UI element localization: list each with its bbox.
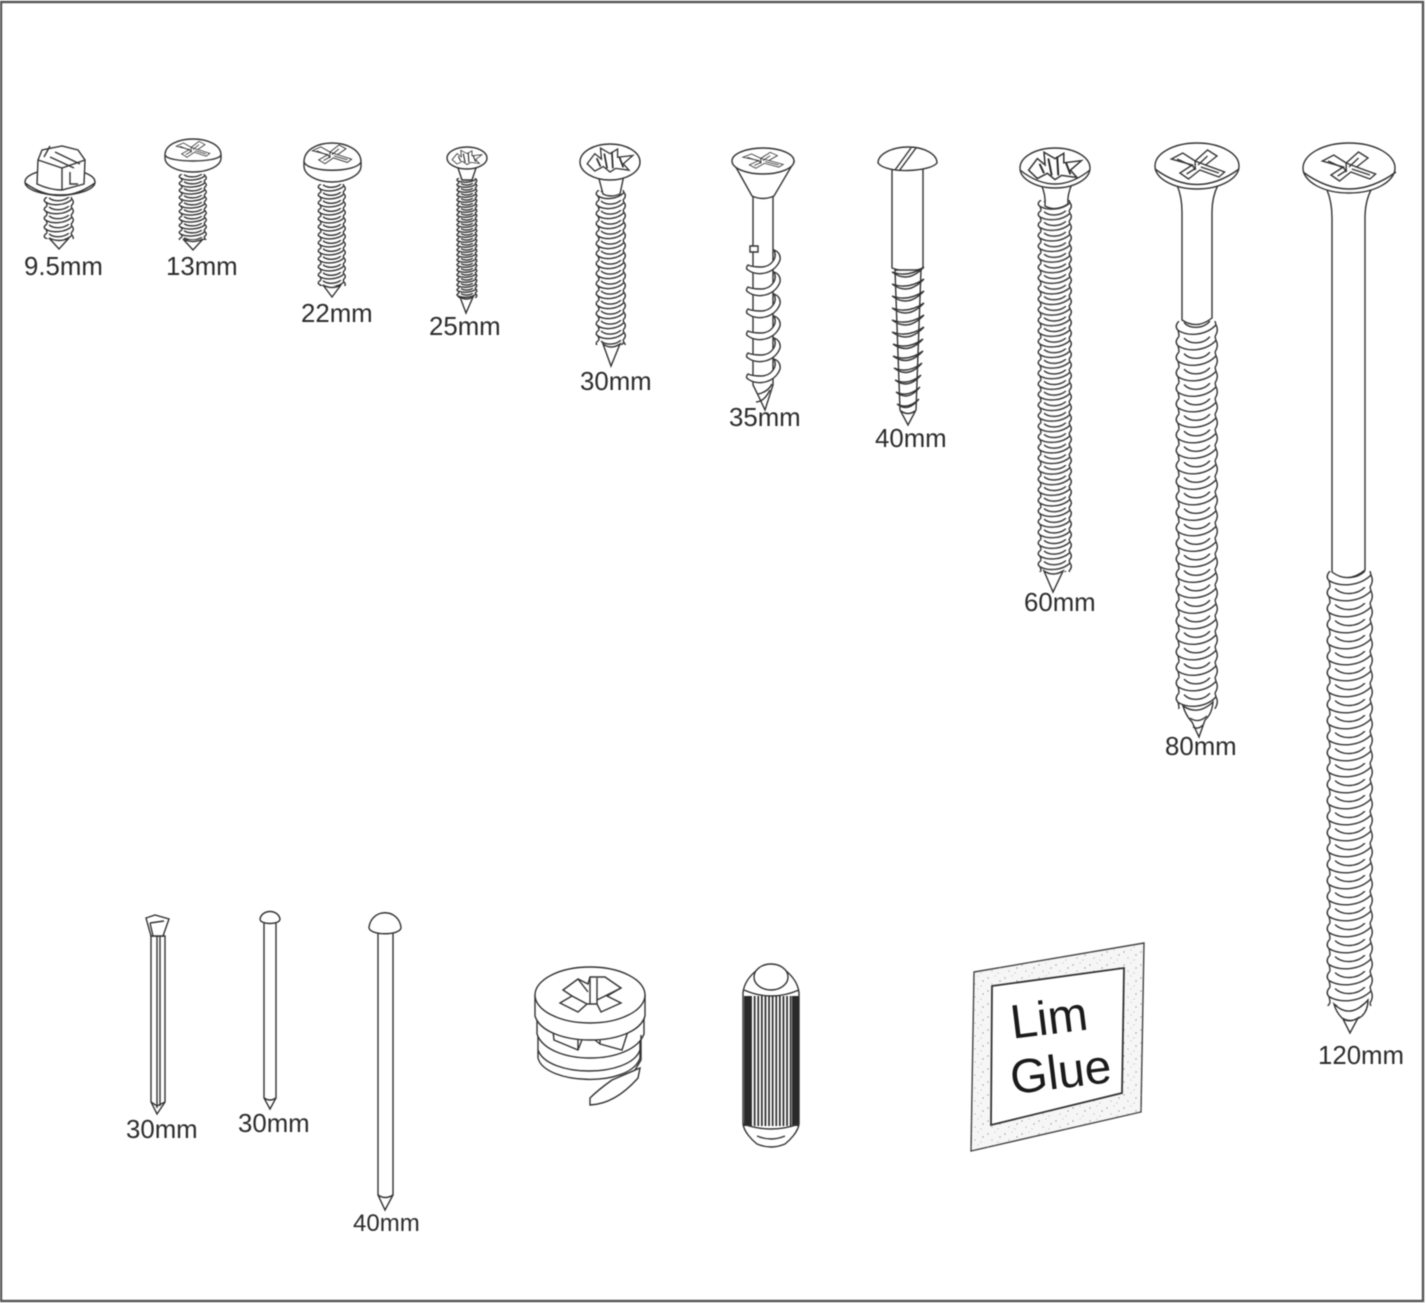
screw: 25mm	[429, 147, 501, 341]
shank	[1327, 190, 1371, 578]
shank	[892, 165, 923, 271]
screw: 120mm	[1303, 143, 1404, 1070]
thread and tip	[178, 174, 208, 250]
top disc	[535, 967, 645, 1040]
head	[165, 139, 221, 172]
glue text: Glue	[1007, 1040, 1114, 1105]
label: 30mm: 30mm	[580, 368, 652, 396]
label: 40mm: 40mm	[875, 425, 947, 453]
sachet outer	[971, 943, 1144, 1151]
screw: 9.5mm	[24, 146, 103, 281]
spiral thread	[746, 250, 780, 383]
screw: 40mm	[875, 147, 947, 453]
thread and tip	[595, 190, 627, 366]
glue text	[1000, 986, 1114, 1105]
cam fitting	[535, 967, 645, 1105]
tapered core and tip	[895, 270, 921, 425]
nail drawing	[151, 936, 165, 1114]
nail shaft	[264, 922, 276, 1109]
thread ribbons	[892, 267, 924, 408]
screw: 60mm	[1020, 148, 1096, 617]
thread and tip	[456, 178, 478, 313]
lower bands and spiral tail	[537, 1012, 644, 1105]
speckle	[971, 943, 1144, 1151]
nail head	[260, 912, 280, 1100]
screw: 13mm	[165, 139, 238, 281]
label: 13mm: 13mm	[166, 253, 238, 281]
label: 60mm: 60mm	[1024, 589, 1096, 617]
label: 25mm: 25mm	[429, 313, 501, 341]
dowel caps	[743, 964, 799, 1139]
thread and tip	[43, 197, 75, 249]
head	[1020, 148, 1090, 209]
sachet inner	[991, 968, 1124, 1125]
label: 30mm: 30mm	[238, 1110, 310, 1138]
label: 120mm: 120mm	[1318, 1042, 1404, 1070]
label: 80mm: 80mm	[1165, 733, 1237, 761]
screw: 80mm	[1155, 143, 1239, 761]
nail: small dome 30mm	[238, 912, 310, 1138]
washer and hex head	[25, 146, 95, 196]
label: 35mm: 35mm	[729, 404, 801, 432]
nail head	[146, 915, 169, 1108]
label: 9.5mm: 9.5mm	[24, 253, 103, 281]
thread and tip	[317, 184, 347, 297]
shank	[1177, 185, 1218, 325]
head	[1303, 143, 1396, 193]
nail: square head 30mm	[126, 915, 198, 1144]
dowel body	[743, 965, 799, 1147]
head	[1155, 143, 1239, 189]
thread and tip	[1037, 200, 1073, 592]
label: 40mm: 40mm	[353, 1210, 420, 1237]
thread and tip	[1326, 571, 1374, 1033]
glue sachet	[971, 943, 1144, 1151]
head	[878, 147, 937, 171]
label: 30mm: 30mm	[126, 1116, 198, 1144]
nail head	[369, 913, 401, 1198]
thread and tip	[1175, 321, 1219, 737]
glue text: Lim	[1007, 988, 1091, 1050]
screw: 30mm	[580, 144, 652, 396]
head	[732, 148, 794, 198]
shank and tip	[750, 190, 773, 410]
notches	[552, 1022, 641, 1070]
nail: dome 40mm	[353, 913, 420, 1237]
head	[304, 143, 361, 182]
label: 22mm: 22mm	[301, 300, 373, 328]
nail shaft	[378, 932, 393, 1210]
screw: 22mm	[301, 143, 373, 328]
dowel	[743, 964, 799, 1147]
head	[580, 144, 640, 196]
screw: 35mm	[729, 148, 801, 432]
head	[447, 147, 487, 180]
